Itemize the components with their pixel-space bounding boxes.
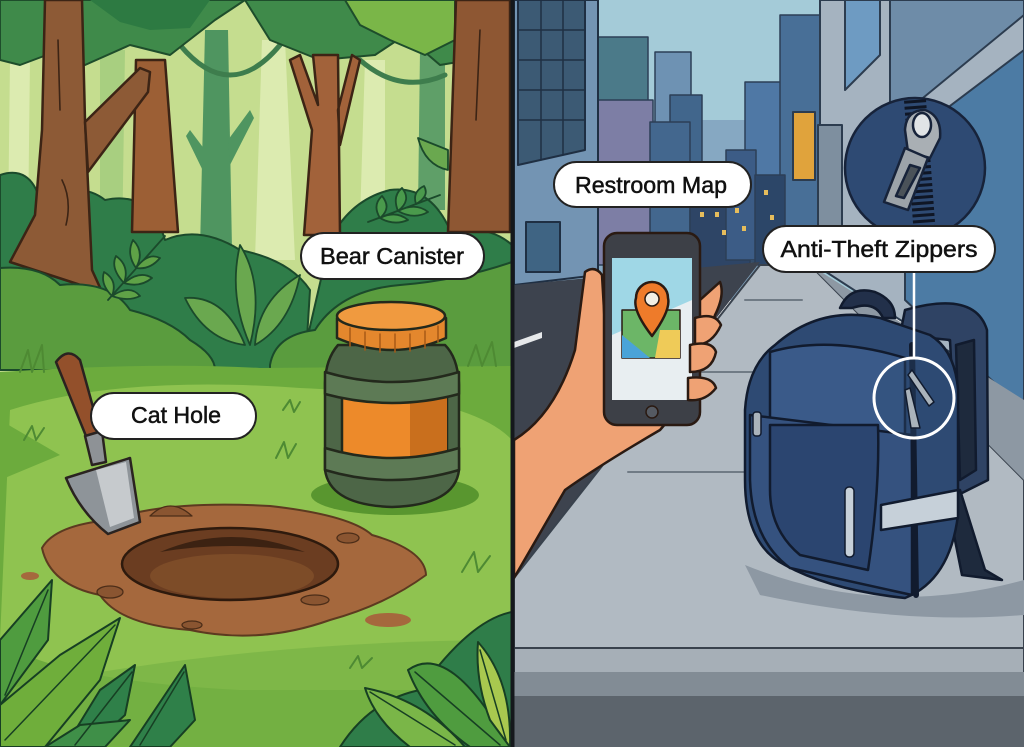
panel: city scene <box>514 0 1024 747</box>
dirt mound <box>42 505 426 636</box>
sky <box>514 0 1024 300</box>
foreground leaves left <box>0 580 195 747</box>
distant buildings <box>598 15 820 275</box>
trowel <box>56 353 140 534</box>
cat hole <box>122 528 338 600</box>
grass tufts <box>20 342 496 668</box>
curb and road bottom <box>514 648 1024 696</box>
zipper magnified circle <box>845 98 985 238</box>
label: Anti-Theft Zippers <box>763 226 995 272</box>
label: Bear Canister <box>301 233 484 279</box>
label: Restroom Map: Restroom Map <box>575 172 727 198</box>
forest canopy <box>0 0 512 65</box>
zipper circle callout <box>874 358 954 438</box>
forest background <box>0 0 512 380</box>
foreground leaves right <box>340 612 512 747</box>
sidewalk <box>514 265 1024 650</box>
panel: forest scene <box>0 0 512 747</box>
backpack <box>745 290 1024 618</box>
right near building <box>793 0 1024 410</box>
fern leaves and mid foliage <box>103 138 448 345</box>
label: Bear Canister: Bear Canister <box>320 243 464 269</box>
connector line <box>913 265 915 358</box>
grass meadow <box>0 366 512 747</box>
label: Anti-Theft Zippers: Anti-Theft Zippers <box>780 236 978 262</box>
road and street <box>514 262 760 578</box>
label: Cat Hole <box>91 393 256 439</box>
tree trunks <box>10 0 510 292</box>
dirt clumps <box>21 506 411 629</box>
label: Cat Hole: Cat Hole <box>131 402 221 428</box>
back bushes <box>0 173 512 370</box>
lit windows <box>700 190 774 235</box>
center divider <box>510 0 514 747</box>
front bushes <box>0 262 512 370</box>
hand holding phone <box>514 233 722 578</box>
left tall building <box>514 0 598 285</box>
label: Restroom Map <box>554 162 751 207</box>
bear canister <box>311 302 479 515</box>
